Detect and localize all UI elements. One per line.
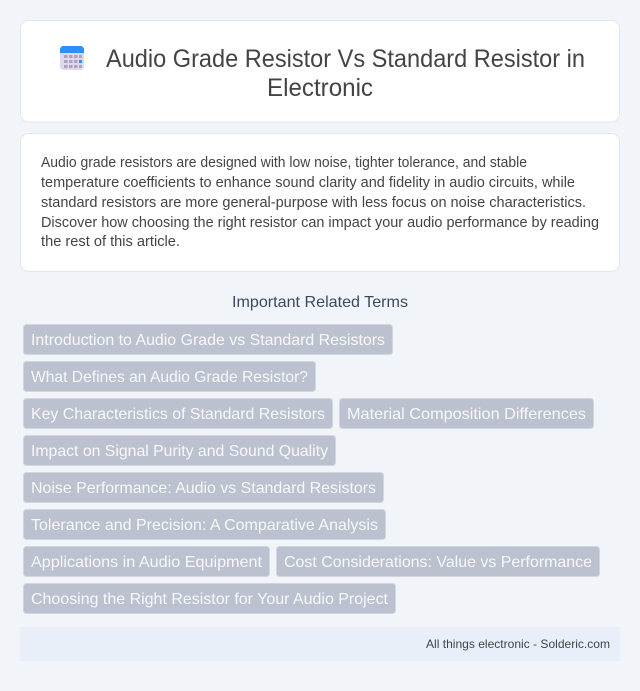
tag: signal purity: [24, 436, 336, 466]
intro text: temperature coefficients to enhance sound clarity and fidelity in audio circuits, while: [41, 175, 575, 191]
tag: applications: Applications in Audio Equipment: [31, 554, 263, 571]
tag: tolerance: [24, 510, 386, 540]
tag: cost: [276, 546, 600, 576]
title: Electronic: [267, 74, 373, 102]
tag: introduction: Introduction to Audio Grade vs Standard Resistors: [31, 332, 385, 349]
tag: what defines: [24, 362, 316, 392]
tag: cost: Cost Considerations: Value vs Performance: [284, 554, 592, 571]
tag: choosing: Choosing the Right Resistor for Your Audio Project: [31, 591, 389, 608]
tag: what defines: What Defines an Audio Grade Resistor?: [31, 369, 308, 386]
tag: noise performance: Noise Performance: Audio vs Standard Resistors: [31, 480, 376, 497]
footer: All things electronic - Solderic.com: [426, 637, 610, 651]
intro text: Audio grade resistors are designed with low noise, tighter tolerance, and stable: [41, 155, 527, 171]
intro text: the rest of this article.: [41, 234, 180, 250]
tag: noise performance: [24, 472, 384, 502]
tag: introduction: [24, 324, 392, 354]
tag: material composition: [340, 398, 594, 428]
icon: calendar: [60, 46, 84, 70]
panel: intro: [20, 134, 620, 272]
tag: signal purity: Impact on Signal Purity and Sound Quality: [31, 443, 328, 460]
title panel: [20, 20, 620, 122]
intro text: Discover how choosing the right resistor can impact your audio performance by reading: [41, 215, 599, 231]
tag: choosing: [24, 584, 396, 614]
tag: applications: [24, 546, 270, 576]
heading: important related terms: Important Related Terms: [232, 294, 408, 311]
intro text: standard resistors are more general-purpose with less focus on noise characteristics.: [41, 195, 586, 211]
title: Audio Grade Resistor Vs Standard Resistor in: [106, 45, 585, 73]
tag: material composition: Material Composition Differences: [347, 406, 586, 423]
footer: [20, 627, 620, 661]
tag: tolerance: Tolerance and Precision: A Comparative Analysis: [31, 517, 378, 534]
tag: key characteristics: [24, 398, 332, 428]
tag: key characteristics: Key Characteristics of Standard Resistors: [31, 406, 325, 423]
